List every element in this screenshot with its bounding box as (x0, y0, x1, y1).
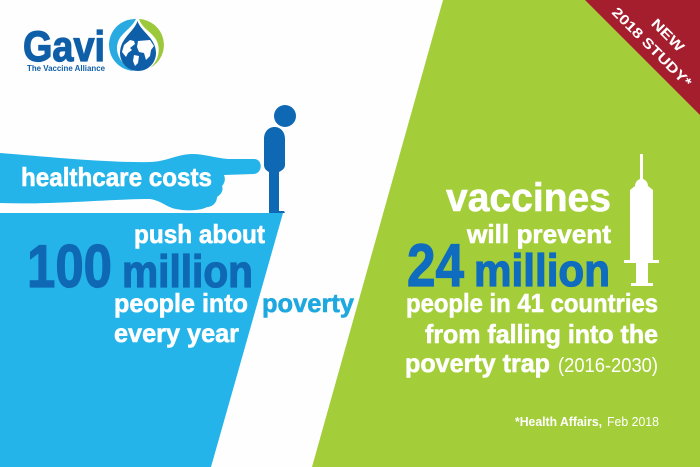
text block: 24 million statement (405, 176, 658, 378)
icon: person on the edge (264, 105, 296, 213)
text: date range: (2016-2030) (558, 355, 658, 377)
text: poverty trap: poverty trap (405, 348, 550, 378)
text: healthcare costs: healthcare costs (21, 162, 212, 192)
text: people into: people into (114, 288, 248, 318)
icon: pointing hand (0, 153, 261, 210)
text: people in 41 countries: people in 41 countries (406, 288, 658, 318)
text: vaccines: vaccines (446, 176, 611, 220)
text block: 100 million statement (27, 219, 355, 348)
source note (515, 414, 659, 429)
icon: syringe (624, 154, 659, 286)
logo tagline: The Vaccine Alliance (27, 63, 105, 73)
text: million: million (474, 245, 610, 296)
panel: green vaccines area (312, 0, 700, 467)
text: million: million (122, 246, 253, 297)
text: from falling into the: from falling into the (425, 319, 658, 349)
banner: new 2018 study: 2018 STUDY* (609, 4, 696, 91)
text: every year: every year (114, 318, 239, 348)
banner: new 2018 study (585, 0, 700, 115)
panel: blue poverty pit (0, 213, 283, 467)
source date: Feb 2018 (607, 414, 659, 429)
text: push about: push about (134, 219, 265, 249)
number: 24: 24 (407, 232, 465, 299)
source title: *Health Affairs, (515, 414, 602, 429)
logo: Gavi (23, 19, 164, 73)
logo globe drop (109, 19, 164, 71)
logo wordmark: Gavi (23, 23, 105, 71)
text: will prevent: will prevent (466, 219, 611, 249)
text: poverty: poverty (262, 288, 355, 318)
number: 100: 100 (27, 233, 112, 300)
banner: new 2018 study: NEW (648, 15, 688, 55)
